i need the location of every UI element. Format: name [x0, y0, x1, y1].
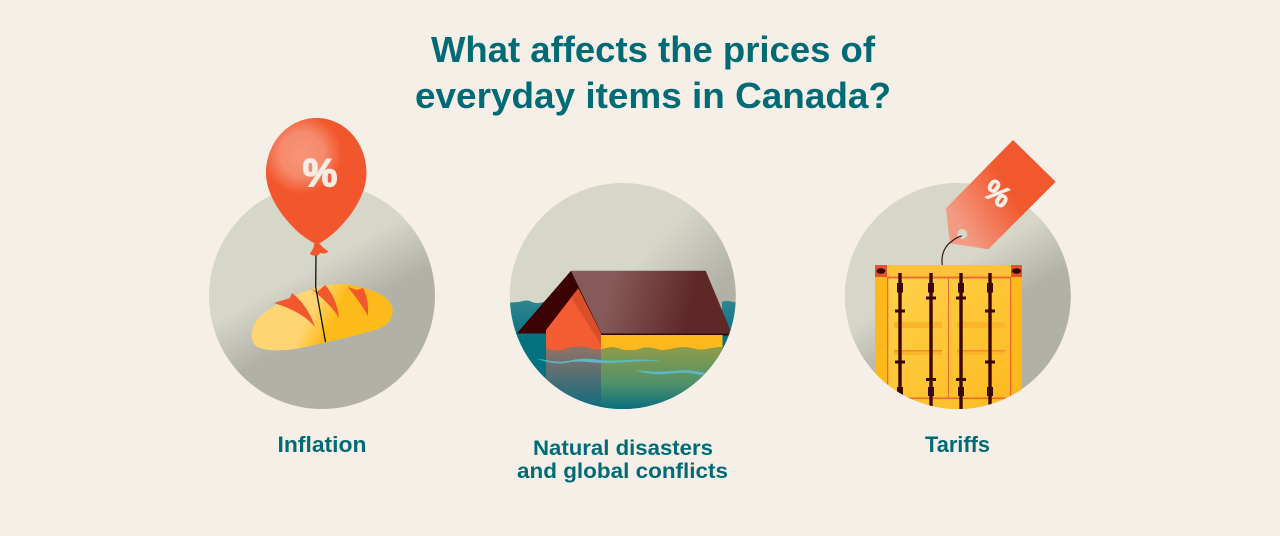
icon: balloon: %	[303, 152, 337, 195]
icon: tariffs backdrop circle	[845, 183, 1071, 409]
panel: tariffs	[845, 140, 1071, 417]
icon: bread loaf	[252, 284, 393, 350]
label: natural disasters and global conflicts: and global conflicts	[517, 460, 728, 483]
title: everyday items in Canada?	[415, 75, 891, 116]
icon: tag string	[942, 236, 962, 265]
title	[415, 29, 891, 116]
icon: inflation backdrop circle	[209, 183, 435, 409]
icon: disaster backdrop circle	[510, 183, 736, 409]
panel: inflation	[209, 118, 435, 409]
label: inflation: Inflation	[278, 432, 366, 457]
title: What affects the prices of	[431, 29, 876, 70]
icon: price tag: %	[977, 174, 1017, 215]
panel: natural disasters	[505, 183, 745, 413]
label: tariffs: Tariffs	[925, 432, 990, 457]
icon: price tag	[946, 140, 1056, 249]
icon: flooded house	[505, 271, 745, 413]
label: natural disasters and global conflicts	[517, 437, 728, 483]
icon: shipping container	[875, 265, 1022, 417]
icon: balloon	[266, 118, 366, 256]
label: natural disasters and global conflicts: Natural disasters	[533, 437, 713, 460]
icon: balloon string	[316, 252, 326, 342]
